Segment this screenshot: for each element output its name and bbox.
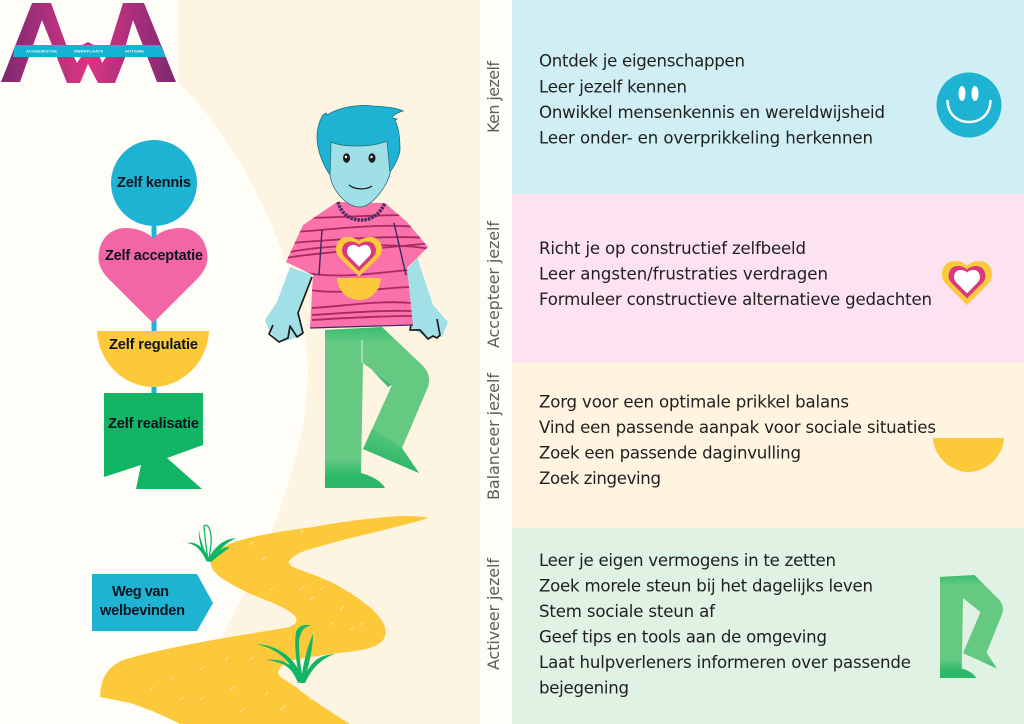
panel: accepteer jezelf	[512, 194, 1024, 362]
panel: accepteer jezelf: Leer angsten/frustraties verdragen	[539, 264, 828, 284]
icon: large grass	[256, 625, 335, 683]
road	[100, 516, 429, 724]
legs	[325, 327, 429, 488]
arms	[265, 257, 448, 342]
half circle: zelf regulatie: Zelf regulatie	[109, 337, 198, 353]
panel: activeer jezelf: Laat hulpverleners informeren over passende	[539, 653, 911, 672]
logo band: AUTISME	[125, 48, 144, 54]
panel: balanceer jezelf: Vind een passende aanpak voor sociale situaties	[539, 418, 936, 437]
arrow label: weg van welbevinden: welbevinden	[99, 603, 185, 619]
shirt heart	[336, 237, 382, 277]
panel: ken jezelf	[512, 0, 1024, 194]
shirt half circle	[337, 278, 381, 300]
half circle: zelf regulatie	[97, 331, 209, 387]
vertical label: activeer jezelf: Activeer jezelf	[484, 558, 503, 670]
shirt	[285, 202, 430, 328]
arrow label: weg van welbevinden	[92, 574, 213, 631]
panel: activeer jezelf: Geef tips en tools aan de omgeving	[539, 628, 827, 646]
panel: accepteer jezelf: Formuleer constructieve alternatieve gedachten	[539, 290, 932, 309]
icon: legs	[940, 575, 1003, 678]
logo band: ACADEMISCHE	[26, 48, 57, 54]
vertical label: balanceer jezelf: Balanceer jezelf	[484, 373, 503, 500]
collar	[338, 202, 385, 220]
vertical label: ken jezelf: Ken jezelf	[484, 61, 503, 133]
circle: zelf kennis	[111, 140, 197, 226]
panel: activeer jezelf	[512, 528, 1024, 724]
icon: smiley	[936, 72, 1002, 138]
panel: activeer jezelf: Leer je eigen vermogens in te zetten	[539, 551, 836, 570]
panel: ken jezelf: Leer jezelf kennen	[539, 78, 687, 96]
panel: ken jezelf: Onwikkel mensenkennis en wereldwijsheid	[539, 103, 885, 122]
background: cream left field	[178, 0, 480, 724]
logo band: WERKPLAATS	[74, 48, 103, 54]
panel: activeer jezelf: bejegening	[539, 678, 629, 698]
panel: balanceer jezelf: Zorg voor een optimale prikkel balans	[539, 392, 849, 412]
hair	[317, 105, 403, 175]
shape: zelf realisatie	[104, 393, 203, 489]
arrow label: weg van welbevinden: Weg van	[112, 584, 169, 600]
panel: balanceer jezelf: Zoek zingeving	[539, 469, 661, 488]
vertical label: accepteer jezelf: Accepteer jezelf	[484, 221, 503, 348]
panel: activeer jezelf: Zoek morele steun bij het dagelijks leven	[539, 576, 873, 596]
logo: AWA	[1, 3, 176, 83]
face	[330, 141, 390, 207]
panel: ken jezelf: Leer onder- en overprikkeling herkennen	[539, 128, 873, 148]
panel: balanceer jezelf	[512, 362, 1024, 528]
panel: balanceer jezelf: Zoek een passende daginvulling	[539, 444, 801, 462]
icon: heart	[942, 261, 992, 305]
circle: zelf kennis: Zelf kennis	[117, 175, 191, 191]
heart: zelf acceptatie: Zelf acceptatie	[105, 248, 203, 264]
character	[265, 105, 448, 488]
icon: half circle	[933, 438, 1004, 472]
heart: zelf acceptatie	[98, 228, 208, 323]
icon: small grass	[187, 525, 236, 562]
panel: ken jezelf: Ontdek je eigenschappen	[539, 52, 745, 70]
panel: accepteer jezelf: Richt je op constructief zelfbeeld	[539, 239, 806, 258]
logo band	[13, 45, 166, 57]
shape: zelf realisatie: Zelf realisatie	[108, 416, 199, 432]
panel: activeer jezelf: Stem sociale steun af	[539, 602, 716, 621]
flow diagram	[97, 140, 209, 489]
